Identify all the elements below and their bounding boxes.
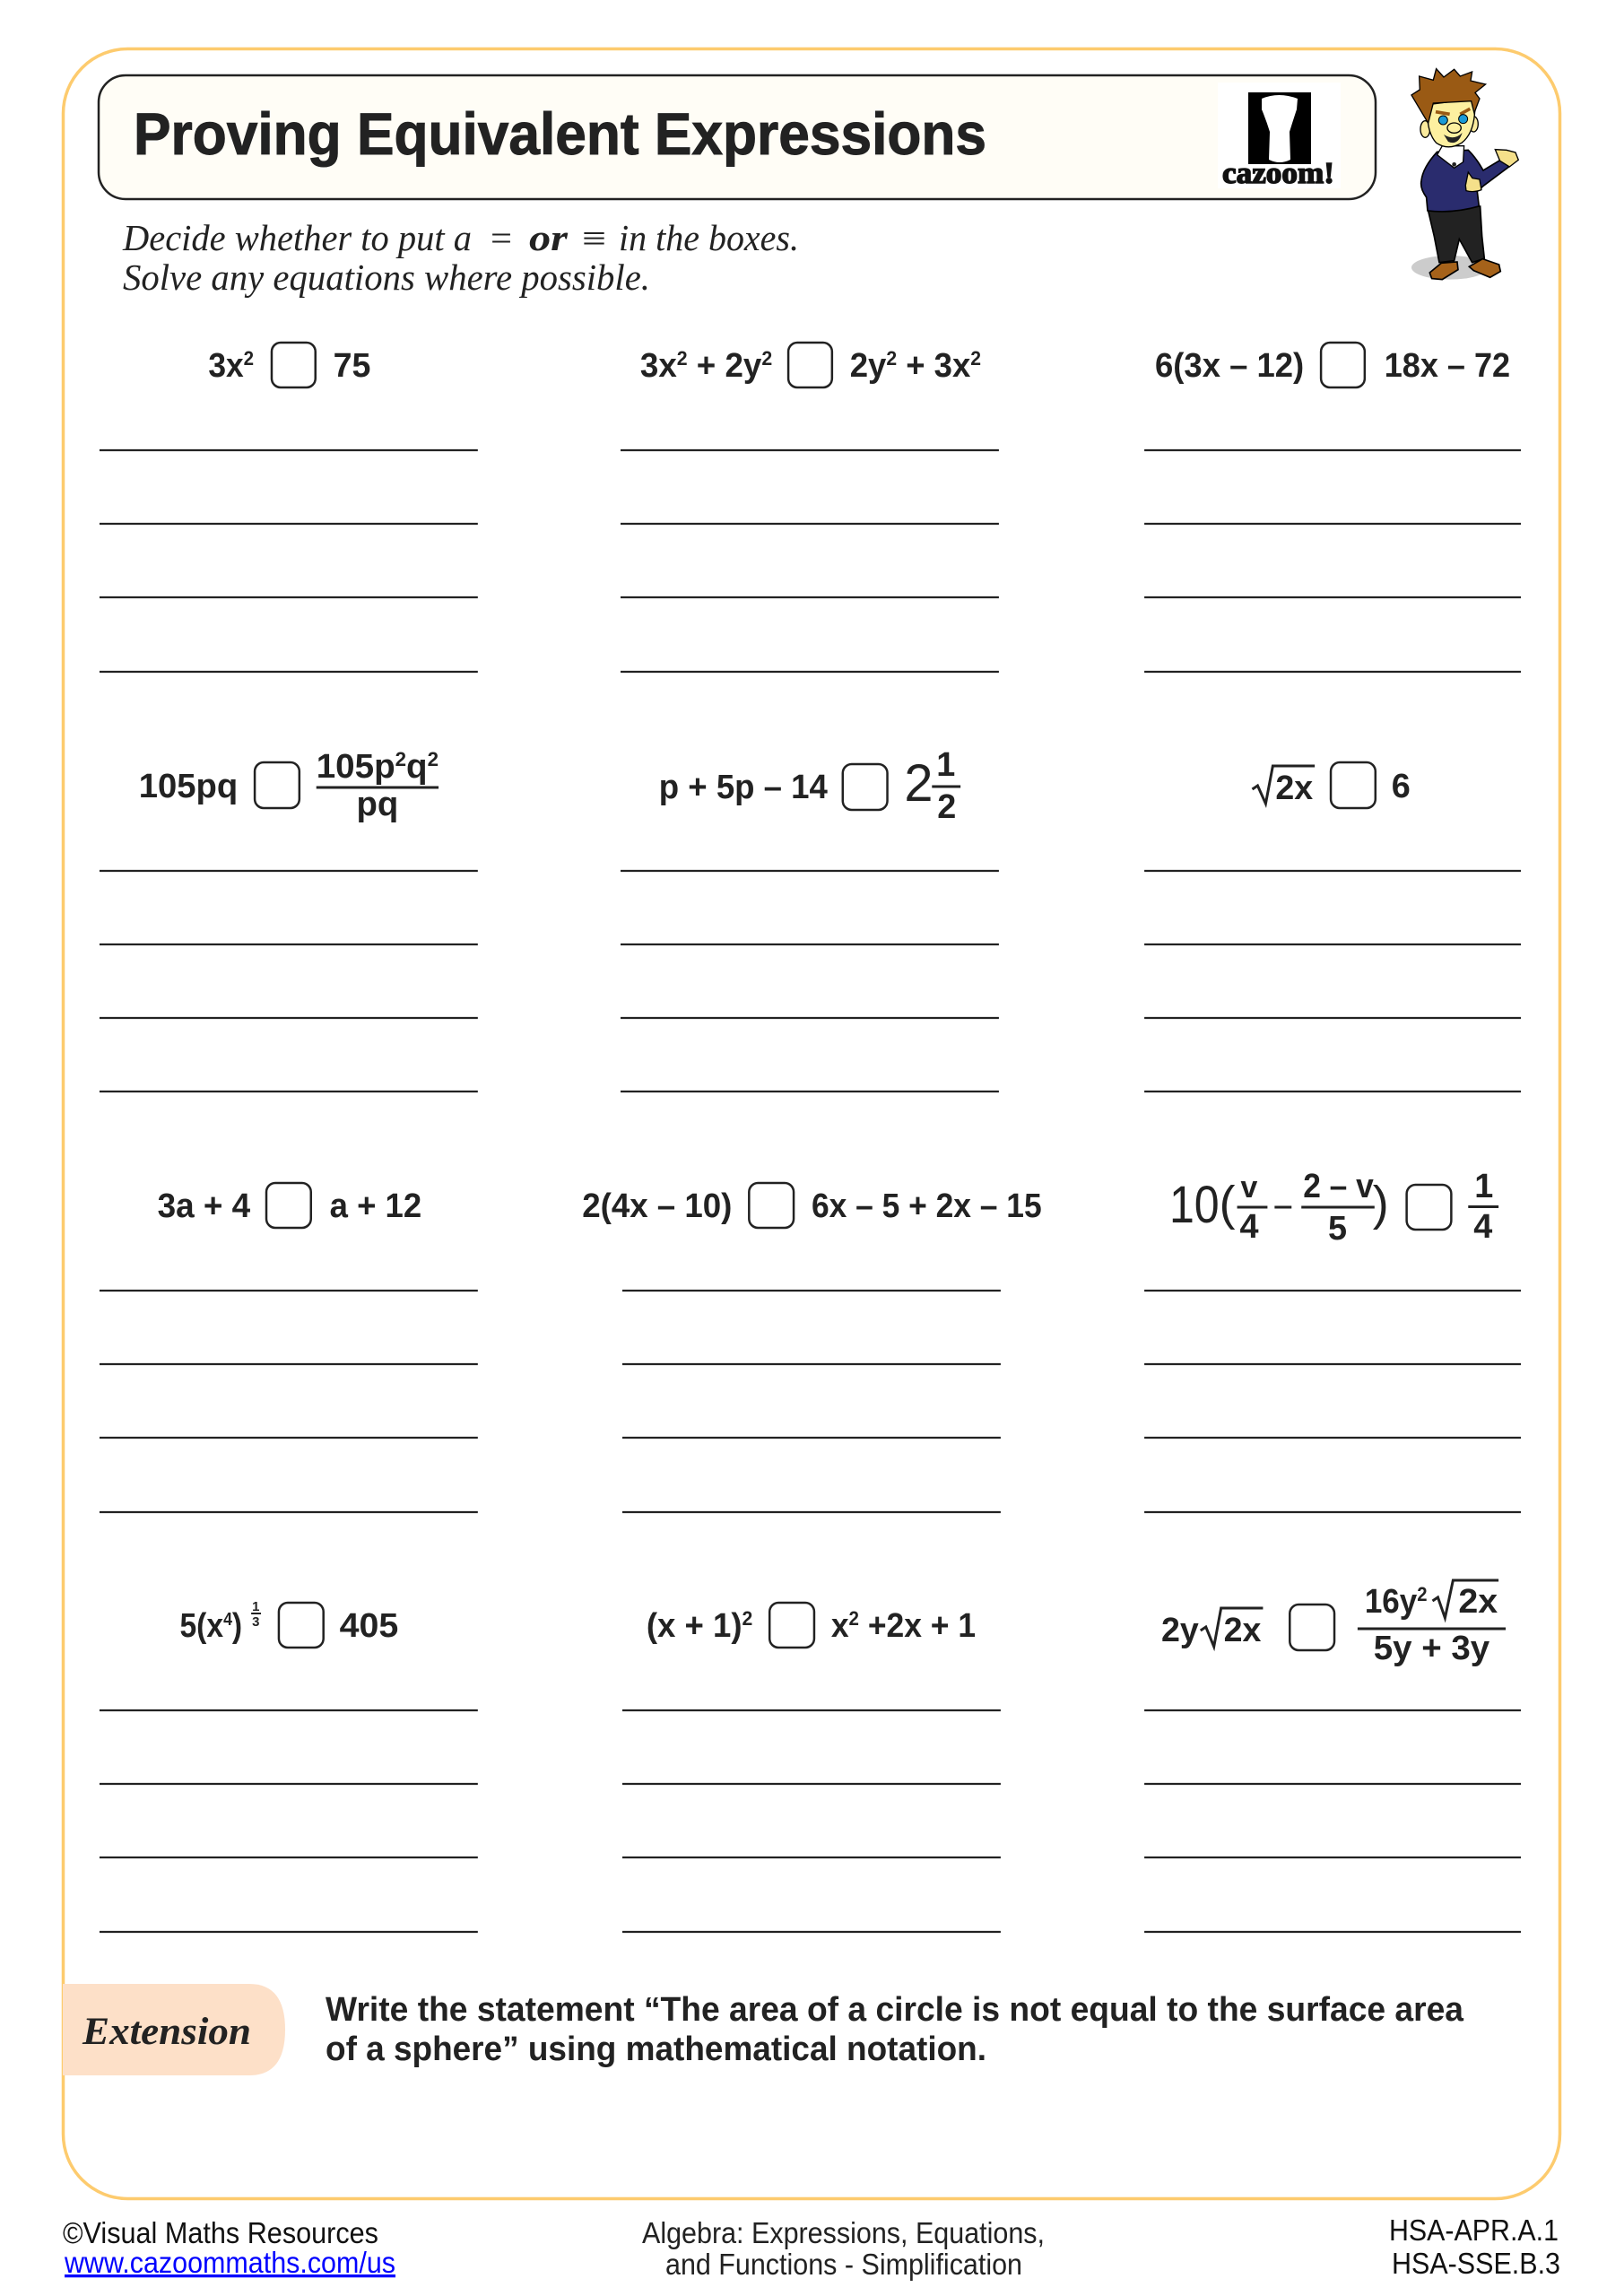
answer box: [266, 1183, 311, 1228]
answer box: [255, 762, 300, 808]
footer: topic: [642, 2216, 1045, 2281]
exercise grid: [100, 343, 1521, 1932]
problem 10: ): [232, 1607, 242, 1645]
fraction with root: 5y + 3y: [1374, 1630, 1489, 1667]
fraction one quarter: [1468, 1168, 1498, 1246]
problem 11: [622, 1603, 1001, 1932]
problem 11: +2x + 1: [859, 1607, 976, 1645]
mixed number: 1: [936, 746, 955, 784]
footer: standards: [1389, 2213, 1560, 2280]
footer: copyright and website: www.cazoommaths.com/us: [64, 2246, 395, 2279]
problem 11: x: [831, 1607, 850, 1645]
extension tab: [63, 1984, 285, 2075]
answer box: [843, 764, 888, 810]
extension question: [326, 1991, 1464, 2068]
fraction v over 4: [1238, 1170, 1267, 1246]
problem 4: 105pq: [139, 768, 238, 805]
instructions: Solve any equations where possible.: [123, 257, 650, 298]
problem 2: + 2y: [688, 347, 761, 385]
extension tab: Extension: [82, 2011, 251, 2053]
instructions: ≡: [582, 218, 606, 258]
cazoom logo: cazoom!: [1222, 157, 1334, 190]
fraction one quarter: 1: [1474, 1168, 1493, 1205]
footer: copyright and website: [63, 2216, 395, 2279]
problem 3: 6(3x – 12): [1155, 347, 1304, 385]
mixed number: [904, 746, 960, 826]
footer: standards: HSA-APR.A.1: [1389, 2213, 1559, 2247]
answer box: [1290, 1605, 1334, 1650]
problem 7: a + 12: [330, 1187, 421, 1225]
fraction with root: 16y: [1365, 1583, 1421, 1621]
cartoon boy mascot: [1411, 69, 1518, 280]
problem 8: [582, 1183, 1042, 1512]
instructions: [122, 217, 799, 298]
problem 10: 405: [340, 1607, 398, 1645]
square root: [1201, 1608, 1263, 1649]
fraction 2 minus v over 5: 2 – v: [1303, 1168, 1374, 1205]
footer: topic: Algebra: Expressions, Equations,: [642, 2216, 1045, 2249]
problem 5: [621, 746, 999, 1091]
answer box: [769, 1603, 814, 1648]
problem 7: 3a + 4: [158, 1187, 250, 1225]
problem 9: 10: [1169, 1177, 1220, 1234]
footer: copyright and website: ©Visual Maths Resources: [63, 2216, 378, 2249]
problem 2: 2: [970, 347, 981, 370]
fractional exponent: 3: [252, 1614, 259, 1630]
problem 2: 2: [761, 347, 772, 370]
fractional exponent: [251, 1599, 261, 1630]
fraction 2 minus v over 5: [1301, 1168, 1375, 1248]
instructions: in the boxes.: [619, 217, 799, 258]
problem 8: 6x – 5 + 2x – 15: [812, 1187, 1042, 1225]
fraction: 2: [428, 748, 439, 770]
problem 11: 2: [849, 1607, 859, 1630]
problem 8: 2(4x – 10): [582, 1187, 732, 1225]
problem 9: [1144, 1168, 1521, 1512]
answer box: [1321, 343, 1365, 387]
problem 2: + 3x: [897, 347, 970, 385]
problem 11: 2: [743, 1607, 752, 1630]
problem 3: [1144, 343, 1521, 672]
fraction v over 4: v: [1241, 1170, 1258, 1205]
extension question: of a sphere” using mathematical notation.: [326, 2031, 986, 2068]
fraction one quarter: 4: [1473, 1208, 1492, 1246]
problem 1: 75: [334, 347, 370, 385]
problem 9: (: [1220, 1177, 1236, 1231]
instructions: or: [529, 217, 569, 258]
answer box: [1331, 762, 1376, 808]
title: Proving Equivalent Expressions: [134, 100, 986, 167]
answer box: [788, 343, 832, 387]
footer: topic: and Functions - Simplification: [665, 2248, 1022, 2281]
problem 9: ): [1373, 1177, 1389, 1231]
problem 2: 3x: [640, 347, 678, 385]
problem 6: 6: [1392, 768, 1411, 805]
problem 1: 2: [244, 347, 254, 370]
problem 2: [621, 343, 999, 672]
problem 10: 5(x: [179, 1607, 229, 1645]
cazoom logo: [1218, 83, 1341, 190]
problem 4: [100, 748, 478, 1091]
problem 2: 2: [677, 347, 688, 370]
square root: [1252, 766, 1315, 807]
fraction: q: [406, 748, 428, 786]
problem 2: 2y: [850, 347, 888, 385]
footer: standards: HSA-SSE.B.3: [1392, 2247, 1560, 2280]
fraction with root: [1358, 1580, 1506, 1667]
instructions: =: [491, 218, 512, 258]
problem 12: [1144, 1580, 1521, 1932]
fraction: 105p: [317, 748, 394, 786]
mixed number: 2: [904, 755, 934, 813]
problem 11: (x + 1): [647, 1607, 745, 1645]
square root: 2x: [1224, 1612, 1261, 1649]
instructions: Decide whether to put a: [122, 217, 472, 258]
problem 10: [100, 1599, 478, 1932]
answer box: [1407, 1185, 1451, 1230]
extension question: Write the statement “The area of a circle is not equal to the surface area: [326, 1991, 1464, 2029]
fraction: pq: [357, 786, 398, 823]
problem 5: p + 5p – 14: [659, 769, 828, 806]
answer box: [279, 1603, 324, 1648]
answer box: [749, 1183, 794, 1228]
mixed number: 2: [937, 788, 956, 826]
answer box: [272, 343, 316, 387]
problem 6: [1144, 762, 1521, 1091]
fraction with root: 2: [1417, 1583, 1428, 1605]
problem 10: 4: [223, 1610, 232, 1630]
problem 1: [100, 343, 478, 672]
title banner: [99, 75, 1376, 199]
fraction: 2: [395, 748, 406, 770]
problem 3: 18x – 72: [1385, 347, 1510, 385]
problem 1: 3x: [208, 347, 246, 385]
fractional exponent: 1: [252, 1599, 259, 1614]
fraction v over 4: 4: [1240, 1208, 1259, 1246]
fraction: [317, 748, 439, 823]
fraction with root: 2x: [1458, 1583, 1498, 1621]
problem 12: 2y: [1161, 1612, 1199, 1649]
fraction 2 minus v over 5: 5: [1328, 1210, 1347, 1248]
problem 7: [100, 1183, 478, 1512]
square root: 2x: [1275, 770, 1313, 807]
problem 2: 2: [886, 347, 897, 370]
